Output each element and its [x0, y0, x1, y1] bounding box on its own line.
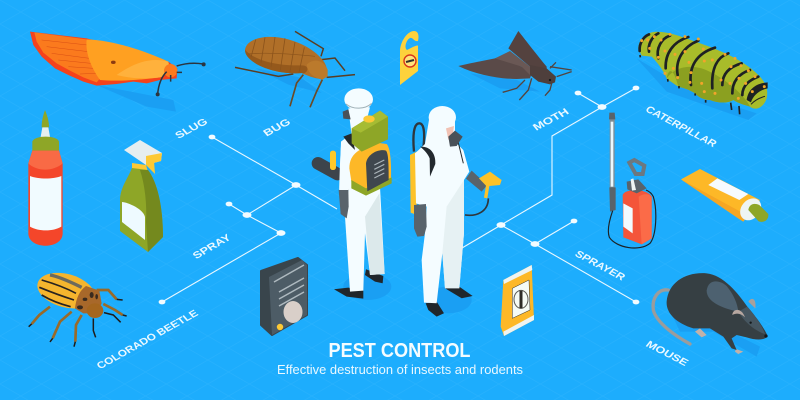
icon: bed bug	[235, 31, 355, 107]
figure: technician with backpack	[318, 88, 392, 300]
icon: toothpaste tube	[681, 169, 768, 225]
title: PEST CONTROL	[328, 340, 470, 362]
icon: ultrasonic repeller device	[261, 258, 307, 335]
label: sprayer: SPRAYER	[572, 249, 628, 283]
label: colorado beetle: COLORADO BEETLE	[95, 308, 201, 372]
label: mouse: MOUSE	[643, 339, 690, 369]
label: spray: SPRAY	[191, 233, 234, 262]
icon: door hanger	[400, 31, 419, 85]
icon: pressure sprayer	[608, 113, 656, 248]
connector lines right	[462, 86, 639, 304]
icon: colorado beetle	[29, 267, 127, 347]
icon: glue bottle	[28, 110, 63, 246]
label: caterpillar: CATERPILLAR	[643, 104, 719, 150]
label: moth: MOTH	[531, 107, 572, 133]
figure: technician with sprayer	[410, 106, 502, 317]
icon: spray bottle	[120, 140, 163, 252]
connector lines left	[159, 135, 337, 304]
icon: mouse	[653, 273, 768, 357]
label: slug: SLUG	[173, 117, 211, 141]
label: bug: BUG	[261, 117, 293, 139]
icon: slug	[30, 32, 206, 112]
icon: poison sachet	[501, 265, 534, 336]
icon: caterpillar	[637, 32, 768, 120]
icon: moth	[458, 31, 572, 100]
subtitle: Effective destruction of insects and rodents	[277, 363, 523, 377]
